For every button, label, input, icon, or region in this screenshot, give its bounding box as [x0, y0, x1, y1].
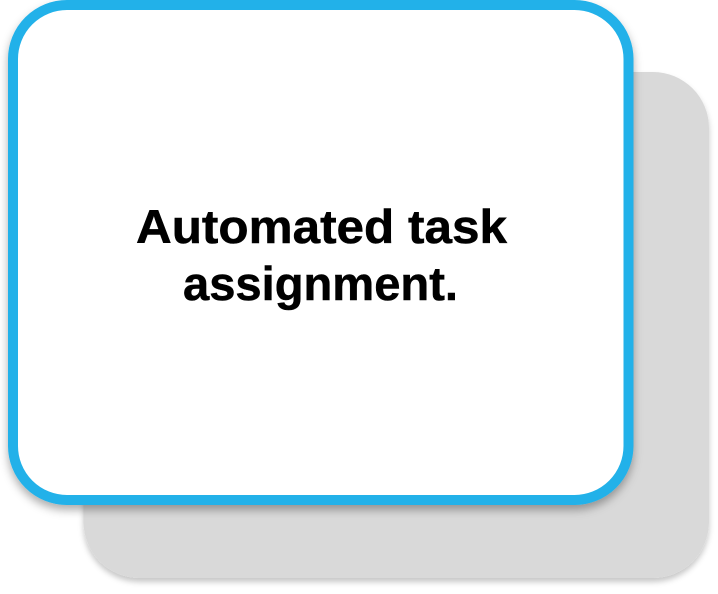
panel: blue-outlined front card: [13, 5, 628, 500]
panel: grey back card: [84, 72, 709, 578]
heading line 1: Automated task: [136, 200, 508, 253]
heading line 2: assignment.: [183, 257, 458, 310]
text block: card message: [136, 200, 508, 310]
